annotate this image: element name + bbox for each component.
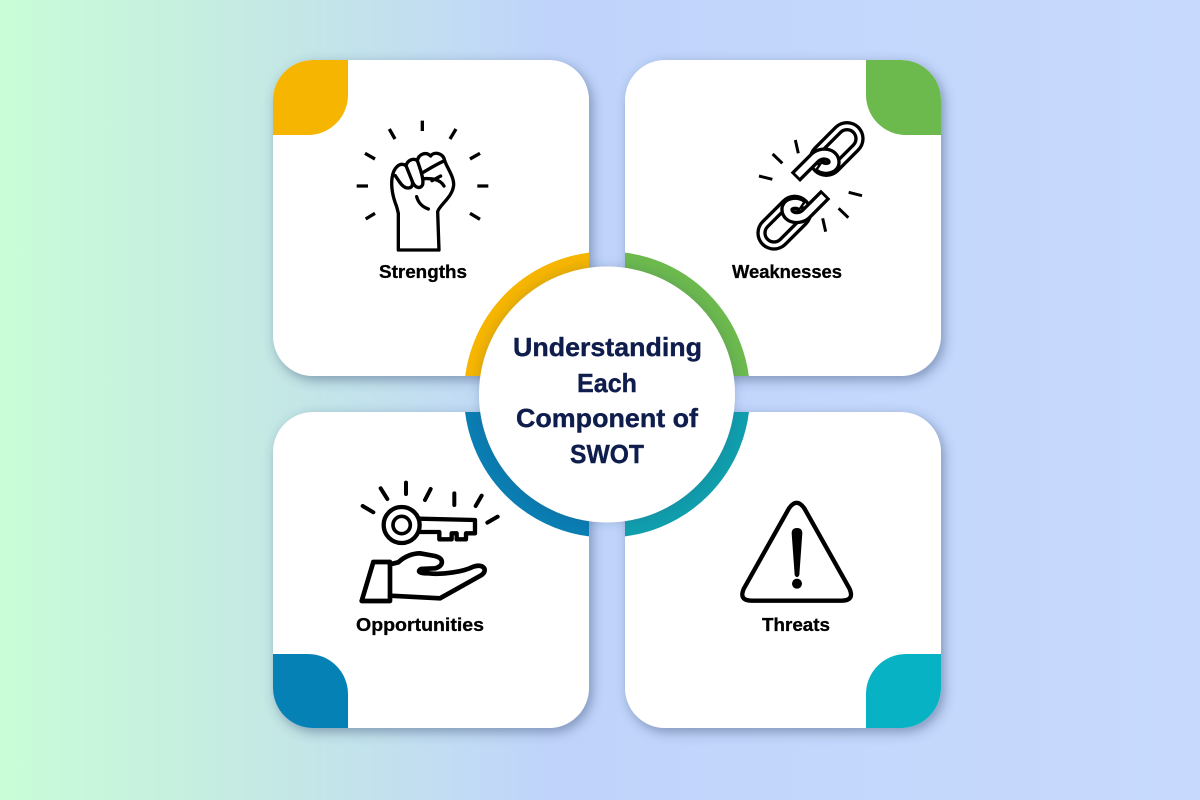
icon: raised fist: [357, 121, 488, 250]
central ring segments: [472, 260, 742, 530]
panel: strengths: [273, 60, 589, 376]
yellow corner accent: [273, 60, 348, 135]
green corner accent: [866, 60, 941, 135]
blue corner accent: [273, 654, 348, 728]
icon: broken chain: [759, 139, 862, 233]
lower link: [774, 192, 862, 233]
teal corner accent: [866, 654, 941, 728]
center title: SWOT: [570, 439, 644, 469]
center title: Each: [577, 368, 637, 398]
center title: Understanding: [513, 332, 702, 362]
ring: yellow: [465, 252, 589, 376]
label: Strengths: Strengths: [379, 262, 467, 282]
ring: green: [625, 252, 749, 376]
center title: Component of: [516, 403, 698, 433]
label: Weaknesses: Weaknesses: [732, 262, 842, 282]
label: Threats: Threats: [762, 615, 830, 635]
central circle: [479, 266, 735, 522]
label: Opportunities: Opportunities: [356, 615, 484, 635]
upper link: [759, 139, 847, 179]
ring: blue: [465, 412, 589, 536]
panel: threats: [625, 412, 941, 728]
panel: weaknesses: [625, 60, 941, 376]
icon: key over open hand: [362, 483, 498, 601]
ring: teal: [625, 412, 749, 536]
center title: [513, 332, 702, 469]
panel: opportunities: [273, 412, 589, 728]
icon: warning triangle: [742, 503, 851, 601]
